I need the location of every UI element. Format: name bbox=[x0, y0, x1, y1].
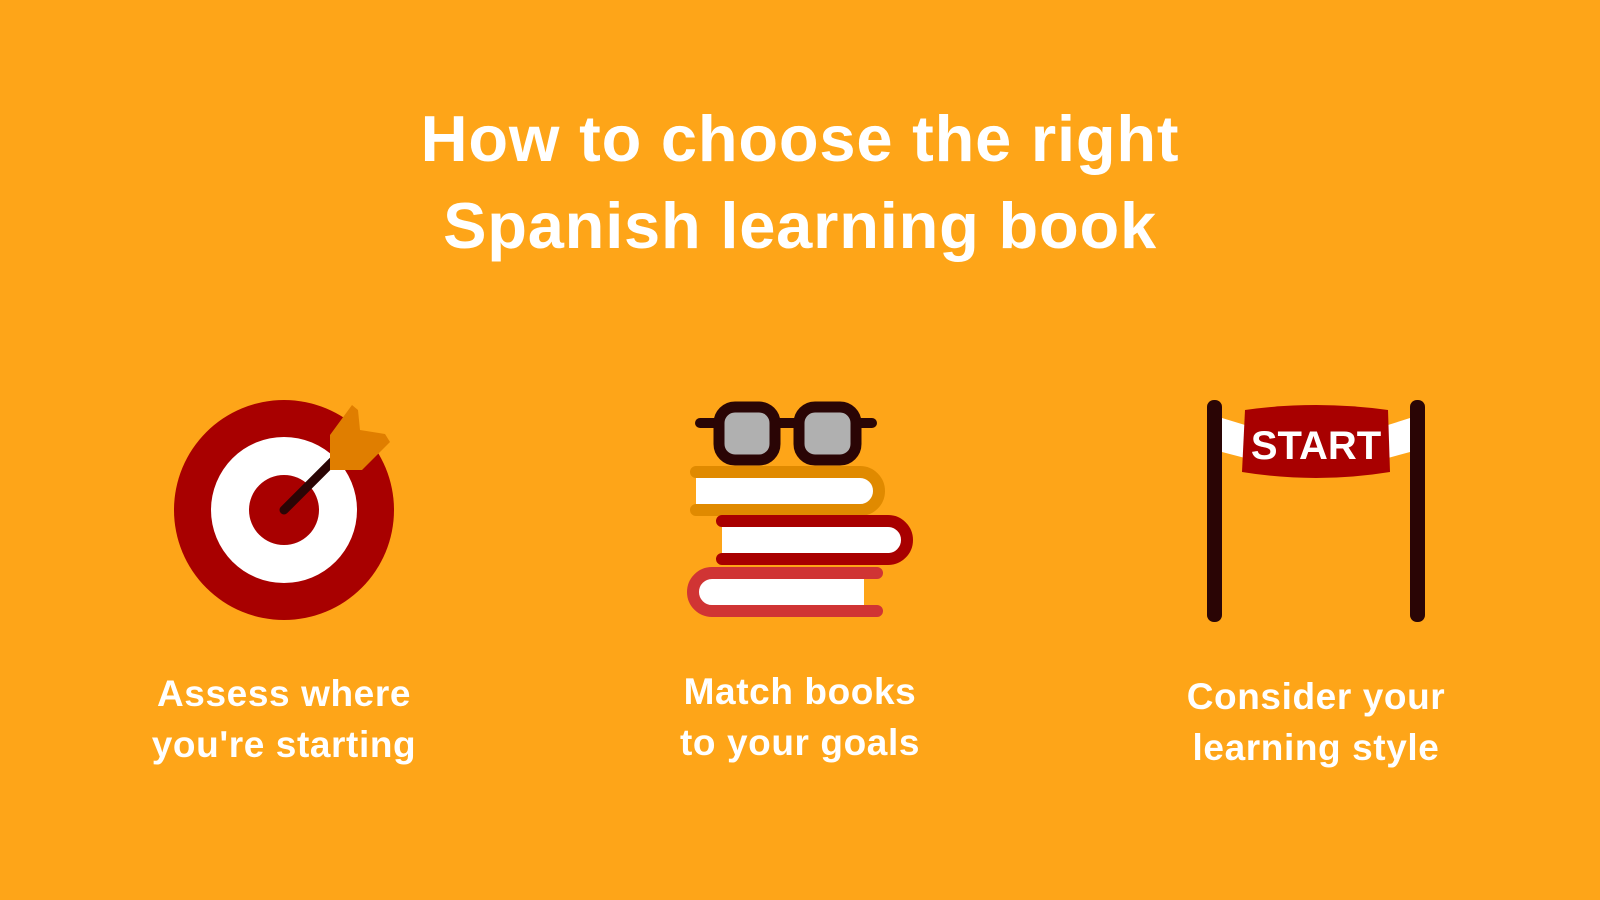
label: match: Match books bbox=[684, 671, 916, 712]
title: How to choose the right bbox=[421, 102, 1179, 175]
label: consider: Consider your bbox=[1187, 676, 1445, 717]
icon: start banner bbox=[1207, 400, 1425, 622]
icon: target with arrow bbox=[174, 400, 394, 620]
label: assess bbox=[152, 673, 416, 765]
label: match bbox=[680, 671, 920, 763]
label: consider bbox=[1187, 676, 1445, 768]
icon: books with glasses bbox=[693, 407, 907, 611]
icon: start banner: START bbox=[1251, 424, 1381, 468]
label: match: to your goals bbox=[680, 722, 920, 763]
label: consider: learning style bbox=[1193, 727, 1439, 768]
title: Spanish learning book bbox=[443, 189, 1157, 262]
title bbox=[421, 102, 1179, 262]
label: assess: you're starting bbox=[152, 724, 416, 765]
label: assess: Assess where bbox=[157, 673, 411, 714]
